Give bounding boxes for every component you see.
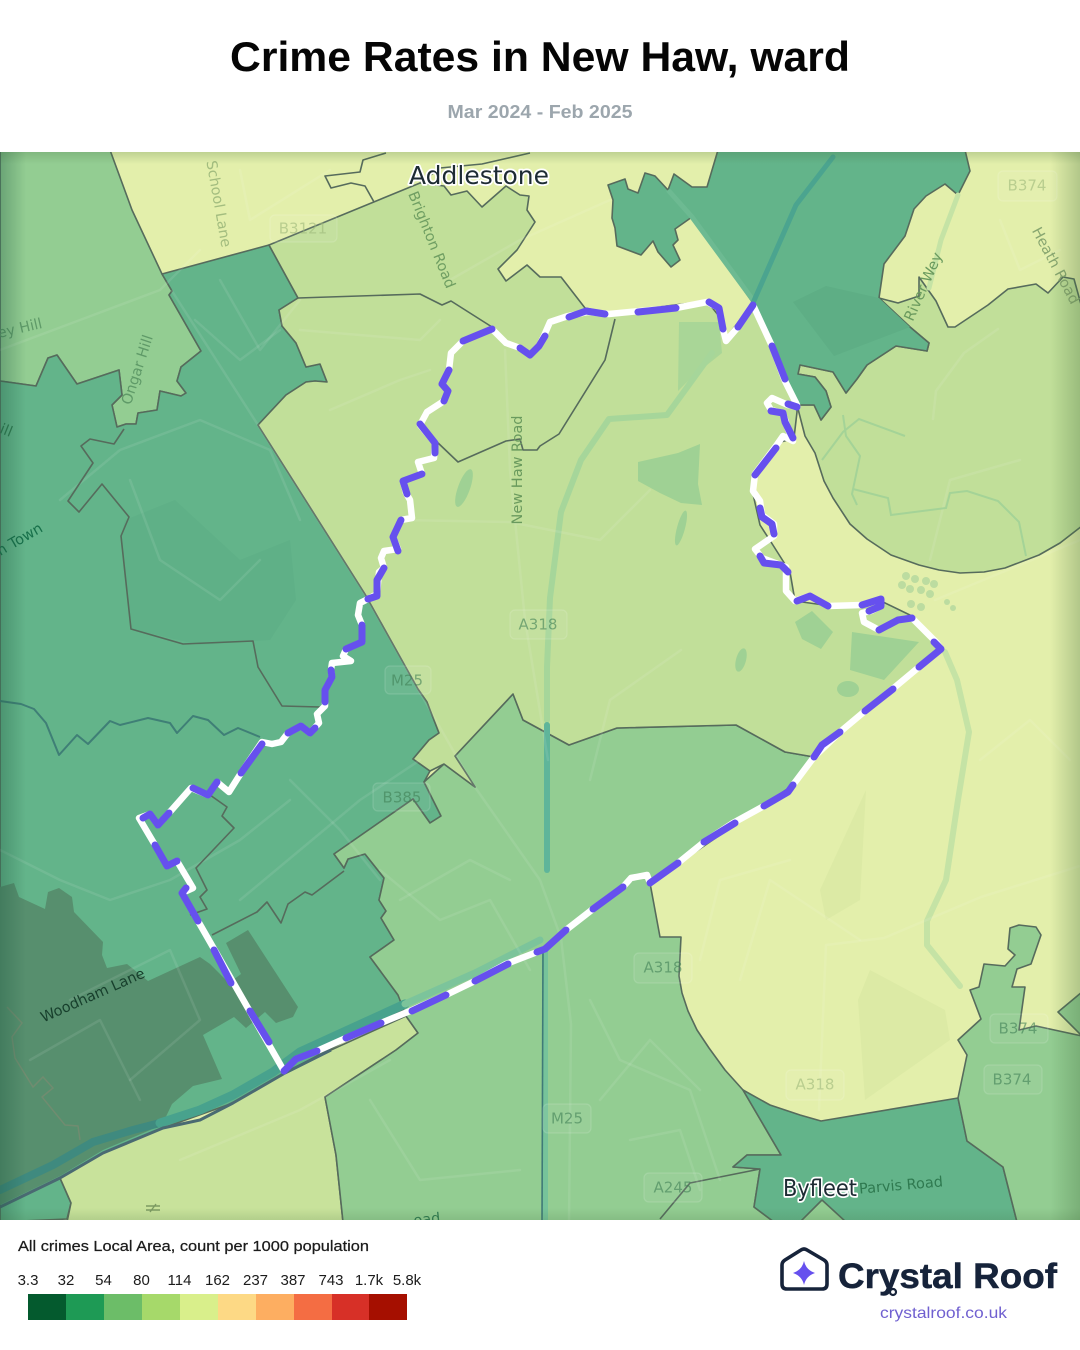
water features: ponds (452, 322, 919, 697)
drainage lines east of river (822, 415, 1026, 556)
street name: Parvis Road: Parvis Road (858, 1174, 944, 1198)
region: ward light area (258, 183, 939, 787)
legend scale values: 32 (58, 1272, 74, 1289)
legend scale values: 54 (95, 1272, 112, 1289)
road label: A318 centre: A318 (519, 616, 557, 634)
street name: Woodham Lane: Woodham Lane (38, 966, 148, 1026)
legend (18, 1238, 422, 1320)
region: woodland shading west (121, 500, 296, 645)
road label: B385: B385 (383, 788, 421, 806)
legend scale values: 237 (243, 1272, 268, 1289)
road label: B374 east (984, 1065, 1042, 1094)
road label: A318 centre (510, 610, 567, 639)
legend scale values: 387 (280, 1272, 306, 1289)
legend title: All crimes Local Area, count per 1000 population (18, 1238, 369, 1255)
region: central south medium area (325, 694, 814, 1222)
icon: railway station (146, 1204, 160, 1212)
ward boundary white line (139, 302, 941, 1071)
legend scale values: 743 (318, 1272, 344, 1289)
legend scale values: 162 (205, 1272, 230, 1289)
road label: M25 south (543, 1104, 591, 1133)
subtitle: date range: Mar 2024 - Feb 2025 (448, 102, 632, 122)
road label: B3121: B3121 (279, 220, 327, 238)
street name: Road fragment: oad (413, 1211, 441, 1229)
logo wordmark: Crystal Roof (838, 1257, 1057, 1296)
river line west (0, 701, 260, 755)
rivers and canals (0, 157, 969, 1222)
road label: A318 east: A318 (796, 1076, 834, 1094)
road label: B3121 (270, 215, 337, 242)
region: east of river light area (797, 277, 1080, 573)
pale parkland patch (820, 790, 866, 920)
Woodham internal boundary (7, 1007, 80, 1140)
road label: A245: A245 (654, 1178, 692, 1196)
town label: Byfleet: Byfleet (783, 1176, 857, 1202)
ward boundary: New Haw (139, 302, 941, 1071)
region: southern light strip (60, 1016, 418, 1222)
pale parkland patch south (858, 970, 950, 1100)
street name: School Lane: School Lane (202, 159, 234, 249)
logo y-tail ring (890, 1289, 896, 1295)
legend scale values: 114 (168, 1272, 191, 1289)
river line along the canal edge (0, 1050, 331, 1207)
region: north-west medium crime area (0, 150, 201, 427)
river line south (542, 949, 543, 1222)
road network (0, 236, 1040, 1216)
road label: M25 north: M25 (391, 672, 423, 690)
region: west higher crime area (0, 245, 441, 1207)
road label: A245 (644, 1173, 702, 1202)
street name: New Haw Road: New Haw Road (510, 416, 526, 524)
road label: B374 east top: B374 (999, 1020, 1037, 1038)
choropleth map (0, 150, 1080, 1229)
region: north-east darker patch (878, 298, 910, 328)
road label: A318 south: A318 (644, 958, 682, 976)
road strip through north-east area (668, 190, 753, 300)
title: Crime Rates in New Haw, ward (230, 33, 850, 80)
region: east edge medium sliver (1058, 992, 1080, 1036)
ward boundary purple dashes (143, 302, 941, 1071)
street name: Brighton Road: Brighton Road (404, 189, 458, 291)
map edge vignette (0, 152, 1080, 1220)
icon: house with star (782, 1249, 827, 1289)
road label: A318 south (634, 953, 692, 983)
region: Woodham highest crime area (0, 883, 298, 1205)
logo url: crystalroof.co.uk (880, 1305, 1008, 1322)
internal ward boundary lines (68, 153, 615, 935)
region: north-east higher crime area (608, 150, 970, 420)
road label: B374 east top (990, 1014, 1048, 1043)
road label: M25 south: M25 (551, 1110, 583, 1128)
region: east B374 medium area (958, 925, 1080, 1222)
legend scale values (18, 1272, 422, 1289)
street name: River Wey: River Wey (902, 250, 946, 324)
sewage works dots (898, 572, 956, 611)
legend scale values: 80 (133, 1272, 150, 1289)
legend scale values: 3.3 (18, 1272, 38, 1289)
logo: Crystal Roof (782, 1249, 1057, 1322)
region: south-east Byfleet higher crime area (733, 1090, 1017, 1222)
legend colour bar (28, 1294, 407, 1320)
road label: B374 east: B374 (993, 1070, 1031, 1088)
street name: Ongar Hill: Ongar Hill (119, 333, 157, 407)
region: south-west small dark area (0, 1178, 71, 1222)
road label: A318 east (786, 1070, 844, 1100)
road label: B374 north-east: B374 (1008, 176, 1046, 194)
town label: Addlestone: Addlestone (409, 161, 549, 190)
legend scale values: 1.7k (355, 1272, 384, 1289)
legend scale values: 5.8k (393, 1272, 422, 1289)
region: Byfleet south medium patch (800, 1200, 846, 1222)
road label: M25 north (385, 666, 431, 694)
road label: B374 north-east (998, 171, 1057, 201)
region: A245 medium patch (660, 1169, 760, 1219)
road label: B385 (373, 783, 430, 811)
